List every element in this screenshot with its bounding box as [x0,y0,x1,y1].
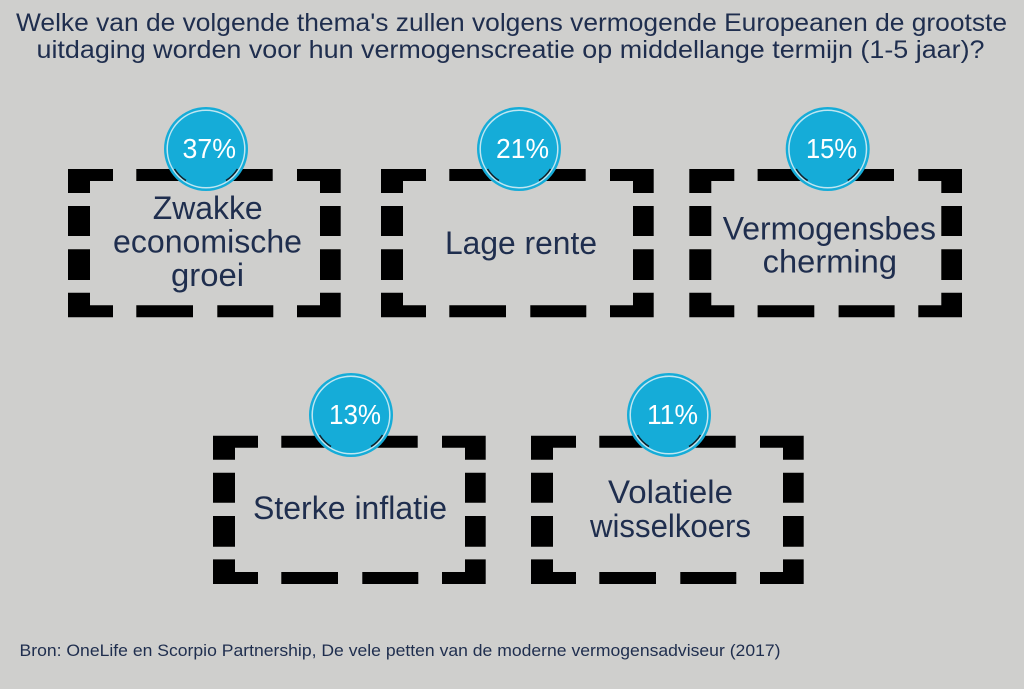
label: Vermogensbes [723,210,936,246]
percentage badge 15% [786,107,870,191]
label [723,210,936,280]
percentage badge 13%: 13% [329,399,381,430]
dashed frame [689,169,962,317]
percentage badge 37%: 37% [182,133,236,164]
dashed frame [381,169,654,317]
title: Welke van de volgende thema's zullen volgens vermogende Europeanen de grootste [16,9,1007,37]
dashed frame [531,436,804,584]
title: uitdaging worden voor hun vermogenscreatie op middellange termijn (1-5 jaar)? [36,36,984,64]
percentage badge 21% [477,107,561,191]
percentage badge 11%: 11% [647,399,698,430]
label [113,190,302,293]
percentage badge 37% [164,107,248,191]
source note: Bron: OneLife en Scorpio Partnership, De vele petten van de moderne vermogensadviseur (2017) [20,642,781,660]
label: Lage rente [445,225,597,261]
label: economische [113,224,302,260]
percentage badge 21%: 21% [496,133,549,164]
label: wisselkoers [589,508,751,544]
panel: vermogensbescherming [689,107,962,317]
percentage badge 15%: 15% [806,133,857,164]
label: cherming [763,244,897,280]
label: Volatiele [608,474,733,510]
panel: sterke inflatie [213,373,486,584]
panel: zwakke economische groei [68,107,341,317]
label [589,474,751,544]
title [16,9,1007,64]
dashed frame [213,436,486,584]
percentage badge 13% [309,373,393,457]
percentage badge 11% [627,373,711,457]
label: Sterke inflatie [253,490,447,526]
dashed frame [68,169,341,317]
label: groei [171,257,244,293]
label: Zwakke [153,190,263,226]
panel: volatiele wisselkoers [531,373,804,584]
panel: lage rente [381,107,654,317]
